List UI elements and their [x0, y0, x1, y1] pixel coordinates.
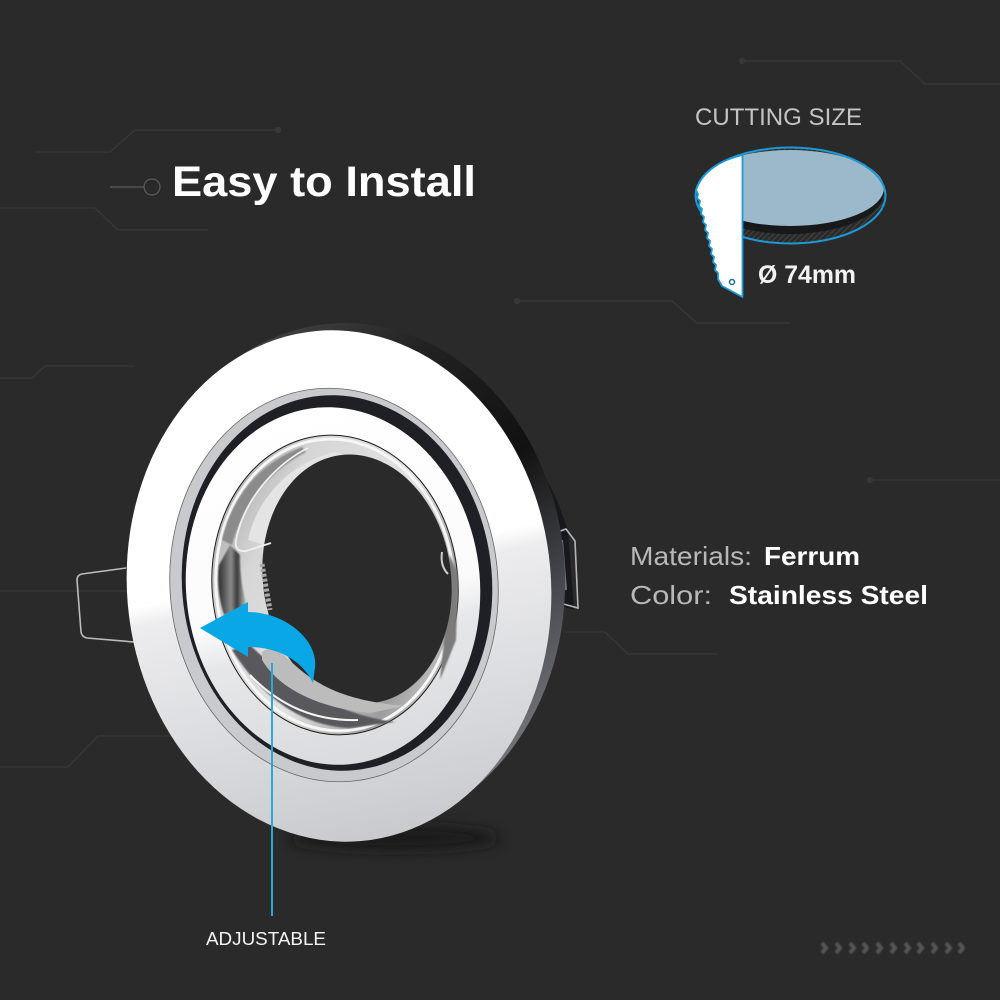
outer rim edge: [120, 312, 578, 844]
left spring clip: [77, 568, 134, 642]
bent retaining wire: [236, 448, 308, 551]
textured bottom contact: [262, 649, 405, 713]
upper left socket stripe: [222, 447, 306, 545]
socket inner white lip: [204, 429, 466, 741]
callout leader line: [271, 663, 273, 916]
right spring clip: [546, 478, 578, 610]
inner bezel: [171, 395, 495, 777]
icon: cutting size disc and saw: [696, 148, 886, 297]
inner groove dark band: [166, 382, 508, 784]
inner light wall: [248, 452, 350, 545]
downlight product photo: [77, 312, 578, 860]
dark chrome reflection on socket wall: [218, 545, 247, 615]
callout label: ADJUSTABLE: [206, 929, 326, 949]
materials and color specifications: Color:: [630, 580, 712, 610]
socket recess: [199, 425, 471, 745]
cutting diameter label: Ø 74mm: [758, 261, 856, 289]
right socket reflection: [440, 555, 458, 680]
light opening: [247, 442, 467, 716]
decorative circuit lines: [0, 58, 1000, 767]
materials and color specifications: Stainless Steel: [729, 580, 928, 610]
outer ring face: [105, 312, 573, 860]
materials and color specifications: [630, 541, 928, 610]
materials and color specifications: Ferrum: [764, 541, 860, 571]
bottom socket reflection: [232, 645, 395, 728]
decorative chevrons: [822, 943, 963, 953]
ground shadow: [290, 826, 500, 850]
cutting size heading: CUTTING SIZE: [695, 104, 862, 131]
right inner clip: [442, 552, 448, 574]
bottom white streak: [250, 675, 358, 720]
inner groove silver edge: [153, 374, 515, 796]
spring coil: [262, 564, 270, 610]
materials and color specifications: Materials:: [630, 541, 752, 571]
title: Easy to Install: [172, 158, 476, 206]
title marker: line and circle: [110, 179, 160, 195]
icon: blue rotation arrow: [200, 602, 315, 683]
